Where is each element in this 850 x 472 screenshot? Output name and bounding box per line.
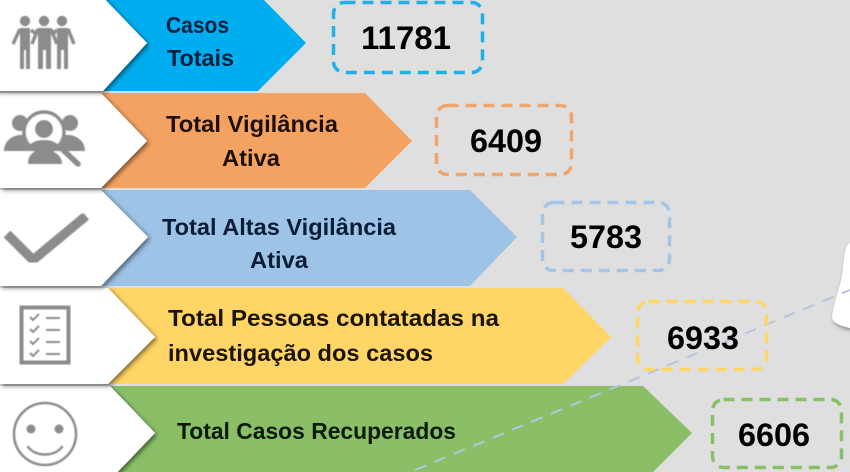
value box: 6933: 6933 (667, 320, 739, 356)
value box: 6606 (712, 400, 842, 468)
label: total altas vigilancia ativa: Ativa (250, 247, 308, 273)
white chevron 3 (0, 190, 148, 286)
white chevron 2 (0, 93, 147, 188)
white chevron 4 (0, 288, 155, 384)
yellow arrow (108, 288, 611, 384)
icon: search people (4, 112, 85, 164)
label: total pessoas contatadas: Total Pessoas contatadas na (168, 305, 499, 331)
row 4: total pessoas contatadas (0, 288, 766, 384)
icon: people (13, 16, 74, 69)
value box: 6933 (638, 302, 766, 370)
value box: 6409 (436, 106, 572, 174)
dashed connector line (415, 290, 850, 470)
label: total vigilancia ativa: Ativa (222, 145, 280, 171)
label: total vigilancia ativa: Total Vigilância (166, 111, 338, 137)
label: casos totais (166, 12, 234, 71)
label: casos totais: Casos (166, 12, 229, 38)
row 3: total altas vigilancia ativa (0, 190, 670, 286)
label: total altas vigilancia ativa: Total Altas Vigilância (162, 214, 396, 240)
green arrow (110, 386, 692, 472)
orange arrow (101, 93, 412, 188)
icon: smiley face (14, 403, 76, 465)
value box: 5783: 5783 (570, 219, 642, 255)
map fragment (832, 243, 850, 328)
value box: 6606: 6606 (738, 417, 810, 453)
label: total pessoas contatadas: investigação dos casos (168, 340, 433, 366)
white chevron 1 (0, 0, 147, 91)
label: total altas vigilancia ativa (162, 214, 396, 273)
row 5: total casos recuperados (0, 386, 842, 472)
label: total casos recuperados: Total Casos Recuperados (177, 418, 456, 444)
value box: 5783 (542, 202, 670, 270)
row 1: casos totais (0, 0, 482, 91)
blue arrow (103, 0, 306, 91)
label: total vigilancia ativa (166, 111, 338, 171)
value box: 6409: 6409 (470, 123, 542, 159)
value box: 11781 (334, 2, 482, 72)
label: casos totais: Totais (167, 45, 234, 71)
value box: 11781: 11781 (361, 20, 451, 56)
label: total pessoas contatadas (168, 305, 499, 366)
white chevron 5 (0, 386, 155, 472)
icon: checklist (22, 308, 68, 362)
icon: check mark (7, 216, 86, 260)
row 2: total vigilancia ativa (0, 93, 572, 188)
light blue arrow (101, 190, 517, 286)
